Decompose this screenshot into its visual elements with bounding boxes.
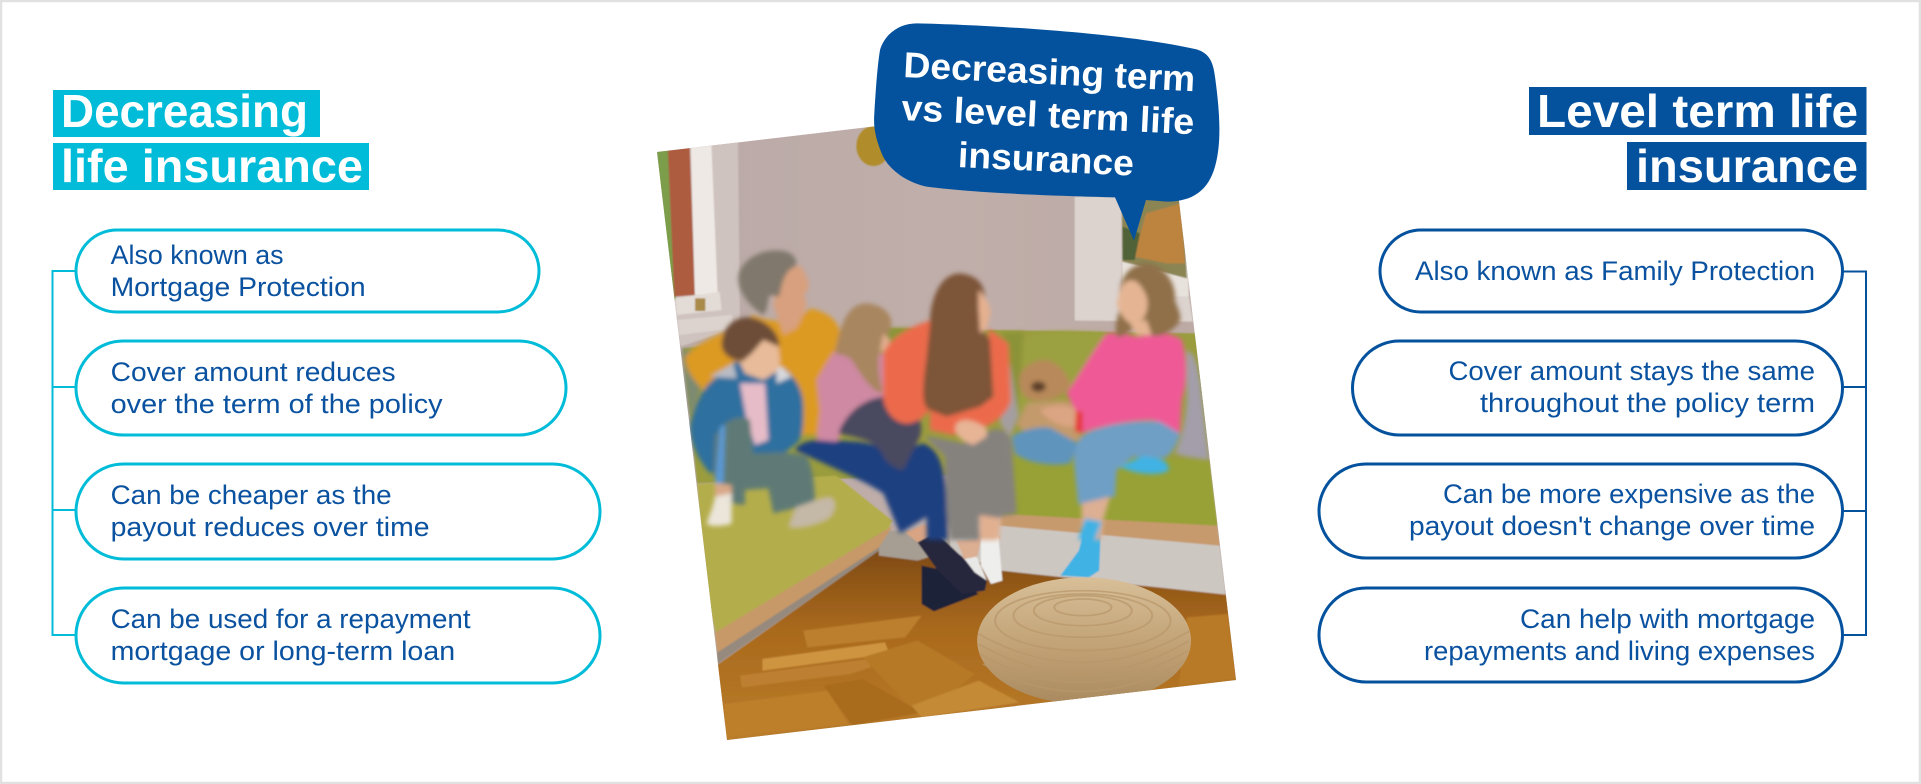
pill: can be more expensive [1319,464,1842,558]
photo: family on sofa [657,126,1236,740]
mother [1012,263,1186,540]
wall [657,126,1236,740]
pill: cover amount stays the same: throughout the policy term [1480,388,1815,418]
teen socks and ankles [956,536,1002,584]
pill: repayment mortgage or loan: Can be used for a repayment [111,604,471,634]
floor [709,551,1238,744]
sofa wood trim right [999,512,1220,546]
pouf [977,577,1191,704]
pill: cover amount reduces [76,341,566,435]
pill: also known as family protection: Also known as Family Protection [1415,256,1815,286]
pill: also known as mortgage protection: Also known as [111,240,284,270]
pill: can be cheaper [76,464,600,559]
sofa base [879,524,1226,595]
pill: mortgage repayments and living expenses: repayments and living expenses [1424,636,1815,666]
pill: can be cheaper: payout reduces over time [111,512,430,542]
panel: decreasing life insurance [52,85,600,683]
pill: cover amount reduces: over the term of the policy [111,389,443,419]
heading: level term life insurance [1529,85,1866,192]
heading: level term life insurance: insurance [1636,140,1858,192]
pill: can be more expensive: payout doesn't change over time [1409,511,1815,541]
man [685,250,947,540]
sofa seat right [1001,456,1218,526]
pill: also known as mortgage protection [76,230,539,312]
pill: repayment mortgage or loan [76,588,600,683]
sofa back cushions [1000,331,1209,460]
pill: mortgage repayments and living expenses [1319,588,1842,682]
pill: mortgage repayments and living expenses: Can help with mortgage [1520,604,1815,634]
title text: Decreasing term [903,44,1196,99]
sofa left arm and cushions [682,327,918,417]
mother sock [1060,519,1101,577]
connector: level term bracket [1842,272,1866,635]
pill: can be more expensive: Can be more expensive as the [1443,479,1815,509]
gold wall light [856,126,891,166]
heading: level term life insurance: Level term life [1537,85,1858,137]
younger girl [817,303,921,470]
title text: vs level term life [901,87,1195,142]
sofa back [683,328,1209,483]
pill: can be cheaper: Can be cheaper as the [111,480,392,510]
man socks [905,524,987,611]
sofa wood and base left [715,526,893,664]
pill: also known as family protection [1380,230,1842,312]
pill: also known as mortgage protection: Mortgage Protection [111,272,366,302]
pill: repayment mortgage or loan: mortgage or long-term loan [111,636,455,666]
title text [901,44,1196,184]
title text: insurance [957,134,1135,184]
sofa seat left [697,476,892,632]
dog [1016,358,1082,443]
pill: cover amount reduces: Cover amount reduces [111,357,396,387]
pill: cover amount stays the same: Cover amount stays the same [1448,356,1815,386]
speech bubble: title [874,23,1219,241]
heading: decreasing life insurance: Decreasing [61,85,308,137]
heading: decreasing life insurance: life insurance [61,140,363,192]
right window [1075,197,1193,322]
people group [682,250,1209,540]
heading: decreasing life insurance [53,85,369,192]
pill: cover amount stays the same [1352,341,1842,435]
left window [652,140,740,347]
panel: level term life insurance [1319,85,1866,682]
connector: decreasing bracket [52,271,75,635]
boy [690,317,835,528]
teen girl [883,273,1017,540]
